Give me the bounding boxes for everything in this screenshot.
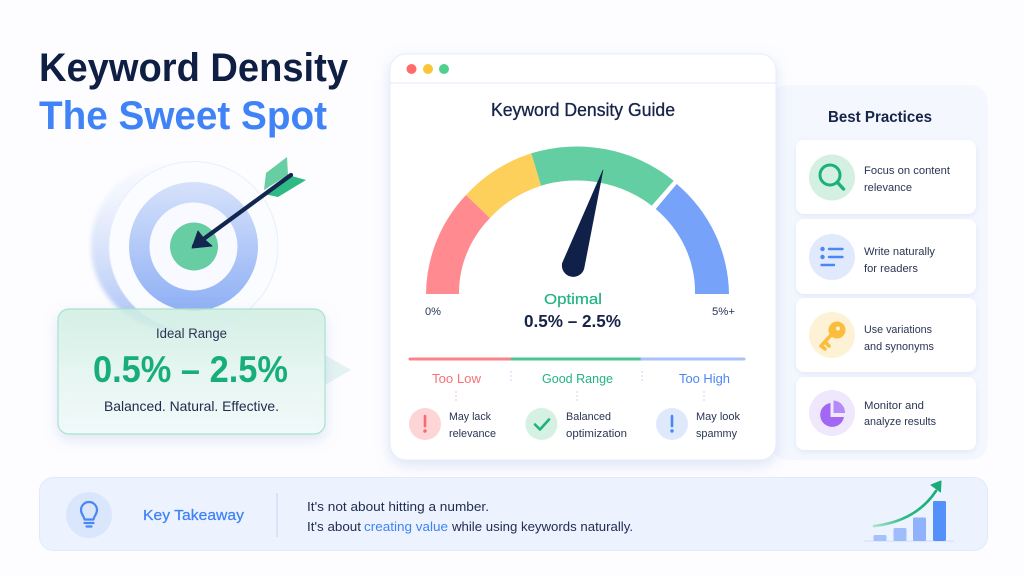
label: key takeaway: Key Takeaway — [143, 507, 245, 524]
column: too high — [656, 371, 740, 440]
card: write naturally: Write naturally — [864, 246, 935, 258]
icon: light bulb — [66, 492, 112, 538]
card: variations — [796, 298, 976, 372]
column: good range: optimization — [566, 428, 627, 440]
column: too high: Too High — [679, 371, 730, 386]
text: takeaway message: It's not about hitting a number. — [307, 499, 489, 514]
card: monitor: Monitor and — [864, 400, 924, 412]
panel: key takeaway — [40, 478, 988, 550]
card: content relevance: Focus on content — [864, 165, 950, 177]
gauge value: 0.5% – 2.5% — [524, 311, 621, 331]
value: ideal range: 0.5% – 2.5% — [93, 349, 288, 390]
column: good range: Balanced — [566, 411, 611, 423]
gauge value: Optimal — [544, 291, 602, 308]
gauge value — [524, 291, 621, 331]
scale labels — [425, 306, 735, 318]
chart: growth bars — [864, 481, 954, 541]
card: monitor — [796, 377, 976, 450]
column: too high: spammy — [696, 428, 737, 440]
window controls — [406, 64, 449, 74]
text: takeaway message: It's about — [307, 519, 361, 534]
title: Keyword Density — [39, 46, 349, 90]
panel: ideal range — [58, 309, 325, 434]
column: too low: May lack — [449, 411, 491, 423]
card: variations: Use variations — [864, 324, 932, 336]
text: takeaway message — [307, 499, 633, 534]
column: too low: relevance — [449, 428, 496, 440]
text: takeaway message: while using keywords naturally. — [451, 519, 633, 534]
title: The Sweet Spot — [39, 94, 327, 138]
label: ideal range: Ideal Range — [156, 325, 227, 341]
arrow: growth trend — [874, 481, 941, 526]
card: content relevance: relevance — [864, 182, 912, 194]
card: variations: and synonyms — [864, 341, 934, 353]
heading: best practices: Best Practices — [828, 109, 932, 126]
chart: gauge — [425, 146, 735, 331]
panel: browser guide window — [390, 54, 776, 460]
card: write naturally: for readers — [864, 263, 918, 275]
scale labels: 5%+ — [712, 306, 735, 318]
arrow: range pointer — [325, 355, 351, 385]
column: too high: May look — [696, 411, 740, 423]
needle — [562, 170, 603, 277]
card: content relevance — [796, 140, 976, 214]
column: too low — [409, 371, 496, 440]
icon: target with arrow — [91, 157, 306, 331]
column: good range — [526, 371, 627, 440]
card: monitor: analyze results — [864, 416, 936, 428]
column: too low: Too Low — [432, 371, 482, 386]
panel: best practices — [770, 85, 988, 460]
text: tagline: Balanced. Natural. Effective. — [104, 398, 279, 414]
heading: guide: Keyword Density Guide — [491, 100, 675, 120]
scale labels: 0% — [425, 306, 441, 318]
text: takeaway message: creating value — [364, 519, 448, 534]
title — [39, 46, 349, 138]
column: good range: Good Range — [542, 371, 613, 386]
card: write naturally — [796, 219, 976, 294]
range bar — [410, 359, 744, 401]
